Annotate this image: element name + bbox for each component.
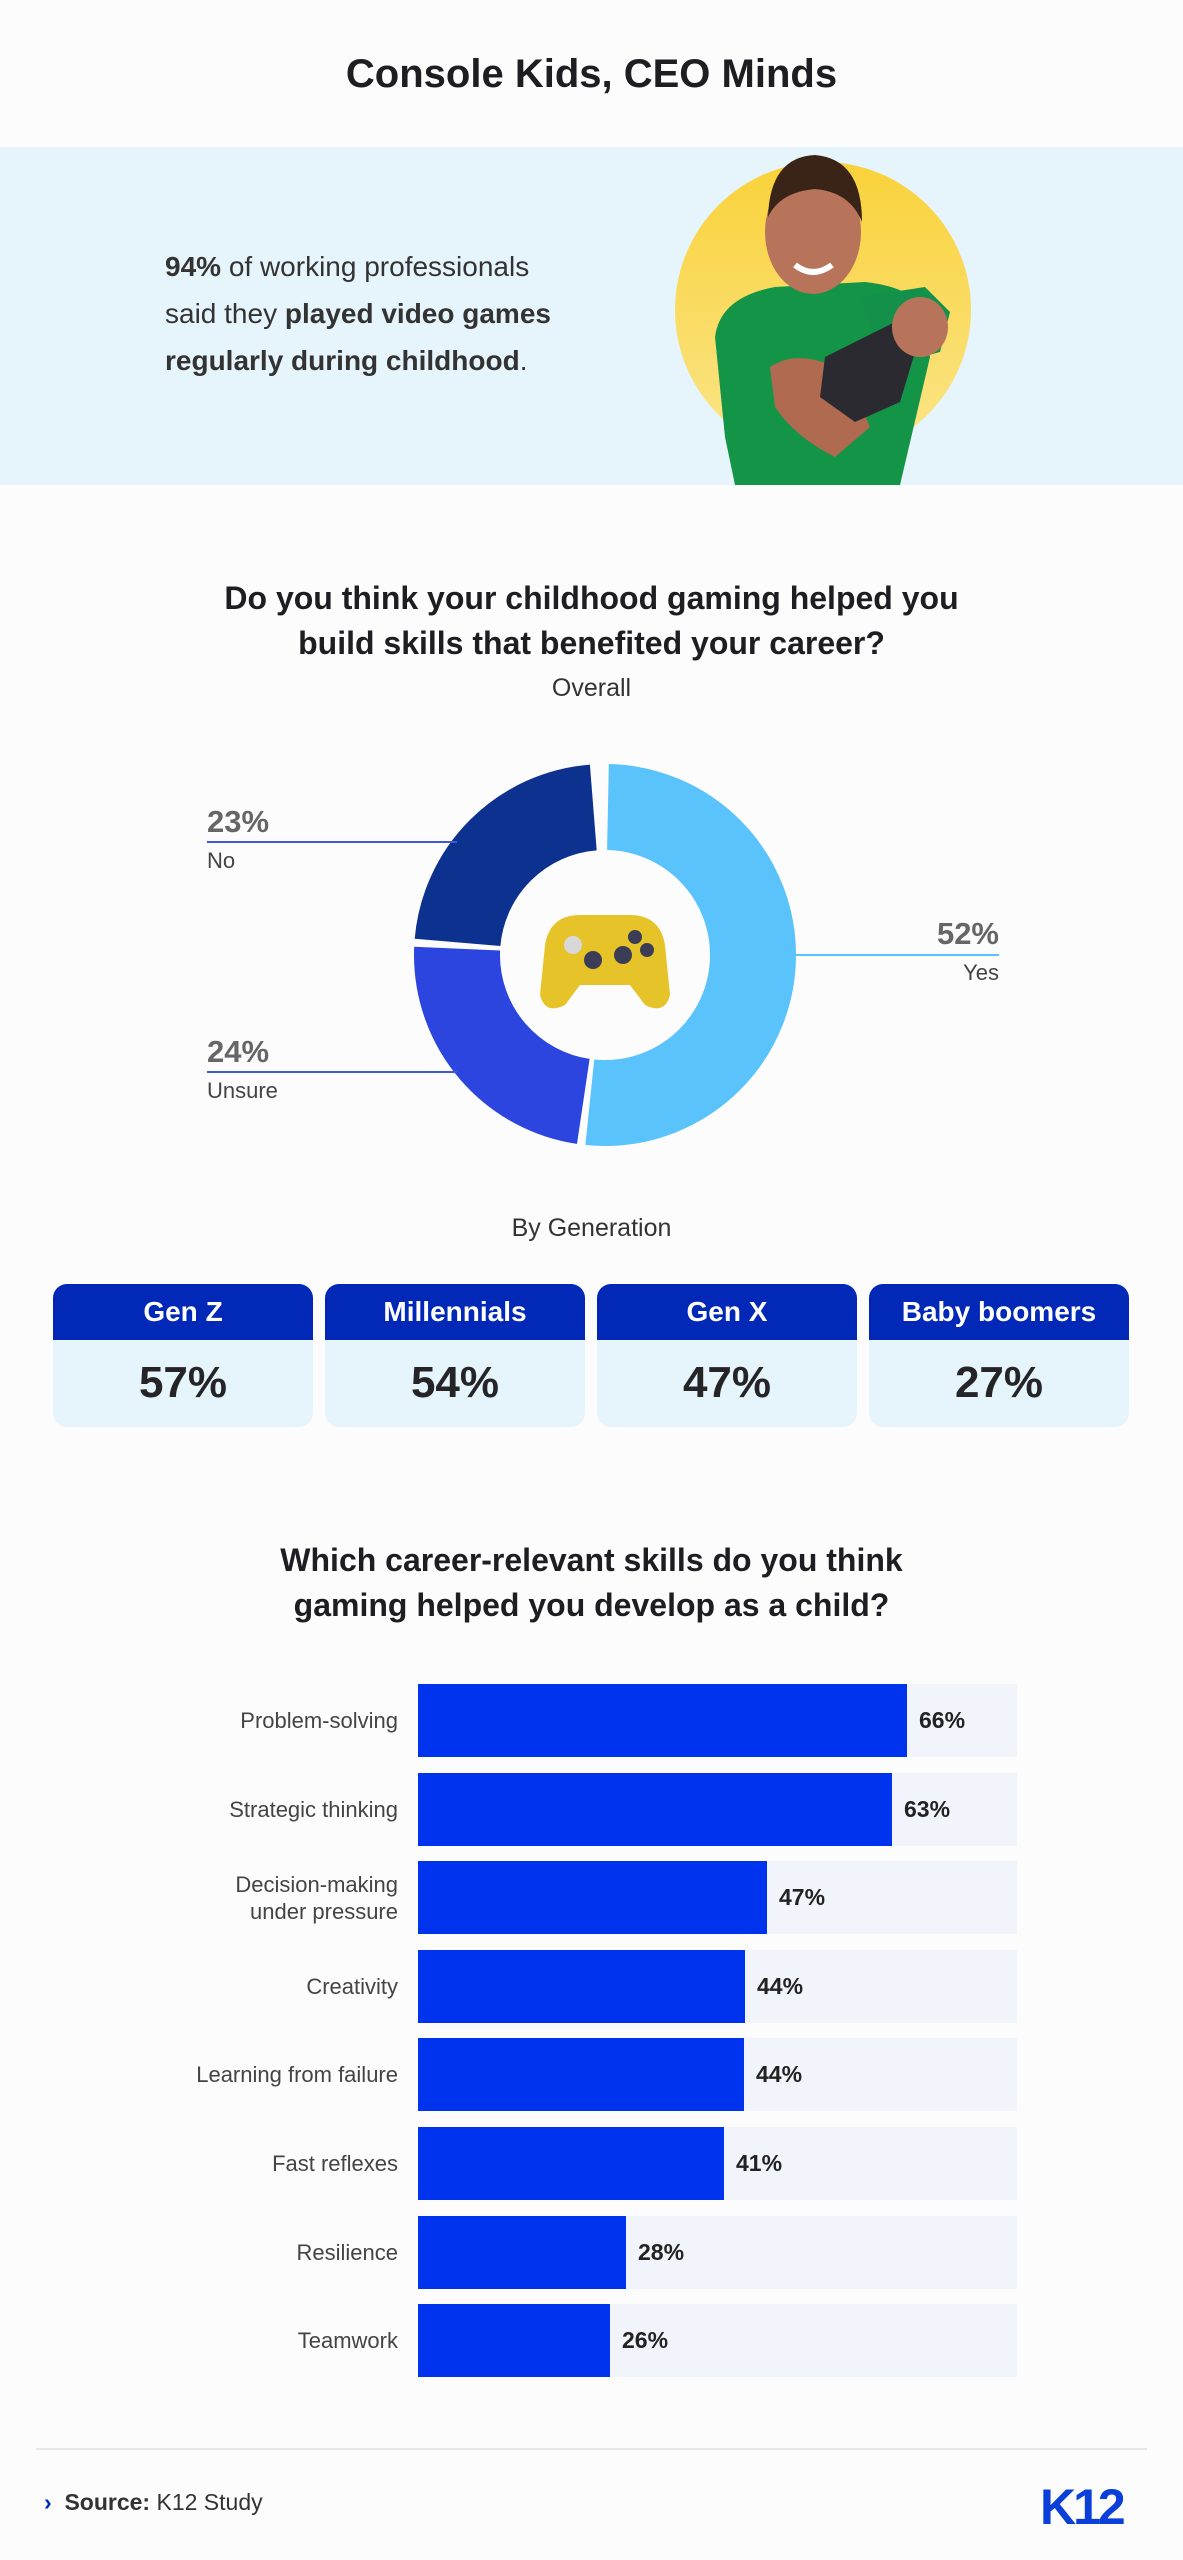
bar: fast reflexes [272, 2127, 1017, 2200]
label: yes 52%: 52% [937, 916, 999, 951]
card: gen z [53, 1284, 313, 1427]
bar: teamwork: Teamwork [298, 2328, 398, 2353]
bar: problem-solving: 66% [919, 1707, 965, 1733]
logo: k12: K12 [1040, 2479, 1123, 2535]
bar: fast reflexes: 41% [736, 2150, 782, 2176]
card: baby boomers: 27% [955, 1358, 1043, 1407]
subheading overall: Overall [552, 674, 631, 702]
question 1 heading [224, 580, 959, 661]
bar: decision-making: 47% [779, 1884, 825, 1910]
card: millennials [325, 1284, 585, 1427]
icon: yellow controller [540, 915, 670, 1008]
question 1 heading: Do you think your childhood gaming helped you [224, 580, 959, 616]
card: baby boomers: Baby boomers [902, 1296, 1096, 1327]
bar: decision-making: Decision-making [235, 1872, 398, 1897]
hero text: 94% of working professionals [165, 251, 529, 282]
hero band [0, 147, 1183, 485]
bar: creativity: Creativity [306, 1974, 398, 1999]
bar: creativity: 44% [757, 1973, 803, 1999]
bar: strategic thinking [229, 1773, 1017, 1846]
question 2 heading: gaming helped you develop as a child? [294, 1587, 889, 1623]
bar chart [196, 1684, 1017, 2377]
bar: strategic thinking: Strategic thinking [229, 1797, 398, 1822]
bar: teamwork: 26% [622, 2327, 668, 2353]
bar: creativity [306, 1950, 1017, 2023]
card: gen z: 57% [139, 1358, 227, 1407]
card: baby boomers [869, 1284, 1129, 1427]
card: gen x: Gen X [687, 1296, 767, 1327]
card: millennials: Millennials [383, 1296, 527, 1327]
bar: fast reflexes: Fast reflexes [272, 2151, 398, 2176]
label: no 23% [207, 804, 269, 873]
bar: learning from failure: 44% [756, 2061, 802, 2087]
label: unsure 24%: Unsure [207, 1078, 278, 1103]
question 2 heading [280, 1542, 903, 1623]
bar: strategic thinking: 63% [904, 1796, 950, 1822]
question 1 heading: build skills that benefited your career? [298, 625, 885, 661]
bar: learning from failure: Learning from failure [196, 2062, 398, 2087]
card: millennials: 54% [411, 1358, 499, 1407]
hero text: regularly during childhood. [165, 345, 527, 376]
label: yes 52% [937, 916, 999, 985]
bar: problem-solving: Problem-solving [240, 1708, 398, 1733]
label: no 23%: No [207, 848, 235, 873]
illustration: boy with controller [675, 155, 971, 485]
hero text: said they played video games [165, 298, 551, 329]
bar: decision-making: under pressure [250, 1899, 398, 1924]
card: gen z: Gen Z [143, 1296, 223, 1327]
bar: problem-solving [240, 1684, 1017, 1757]
bar: resilience: Resilience [296, 2240, 398, 2265]
bar: decision-making [235, 1861, 1017, 1934]
label: unsure 24%: 24% [207, 1034, 269, 1069]
bar: teamwork [298, 2304, 1017, 2377]
label: no 23%: 23% [207, 804, 269, 839]
title: Console Kids, CEO Minds [346, 52, 837, 96]
donut chart [207, 764, 999, 1146]
card: gen x: 47% [683, 1358, 771, 1407]
bar: resilience [296, 2216, 1017, 2289]
label: unsure 24% [207, 1034, 278, 1103]
subheading by generation: By Generation [512, 1214, 671, 1242]
label: yes 52%: Yes [963, 960, 999, 985]
bar: learning from failure [196, 2038, 1017, 2111]
question 2 heading: Which career-relevant skills do you think [280, 1542, 903, 1578]
card: gen x [597, 1284, 857, 1427]
hero text [165, 251, 551, 376]
source: › Source: K12 Study [44, 2489, 263, 2515]
bar: resilience: 28% [638, 2239, 684, 2265]
